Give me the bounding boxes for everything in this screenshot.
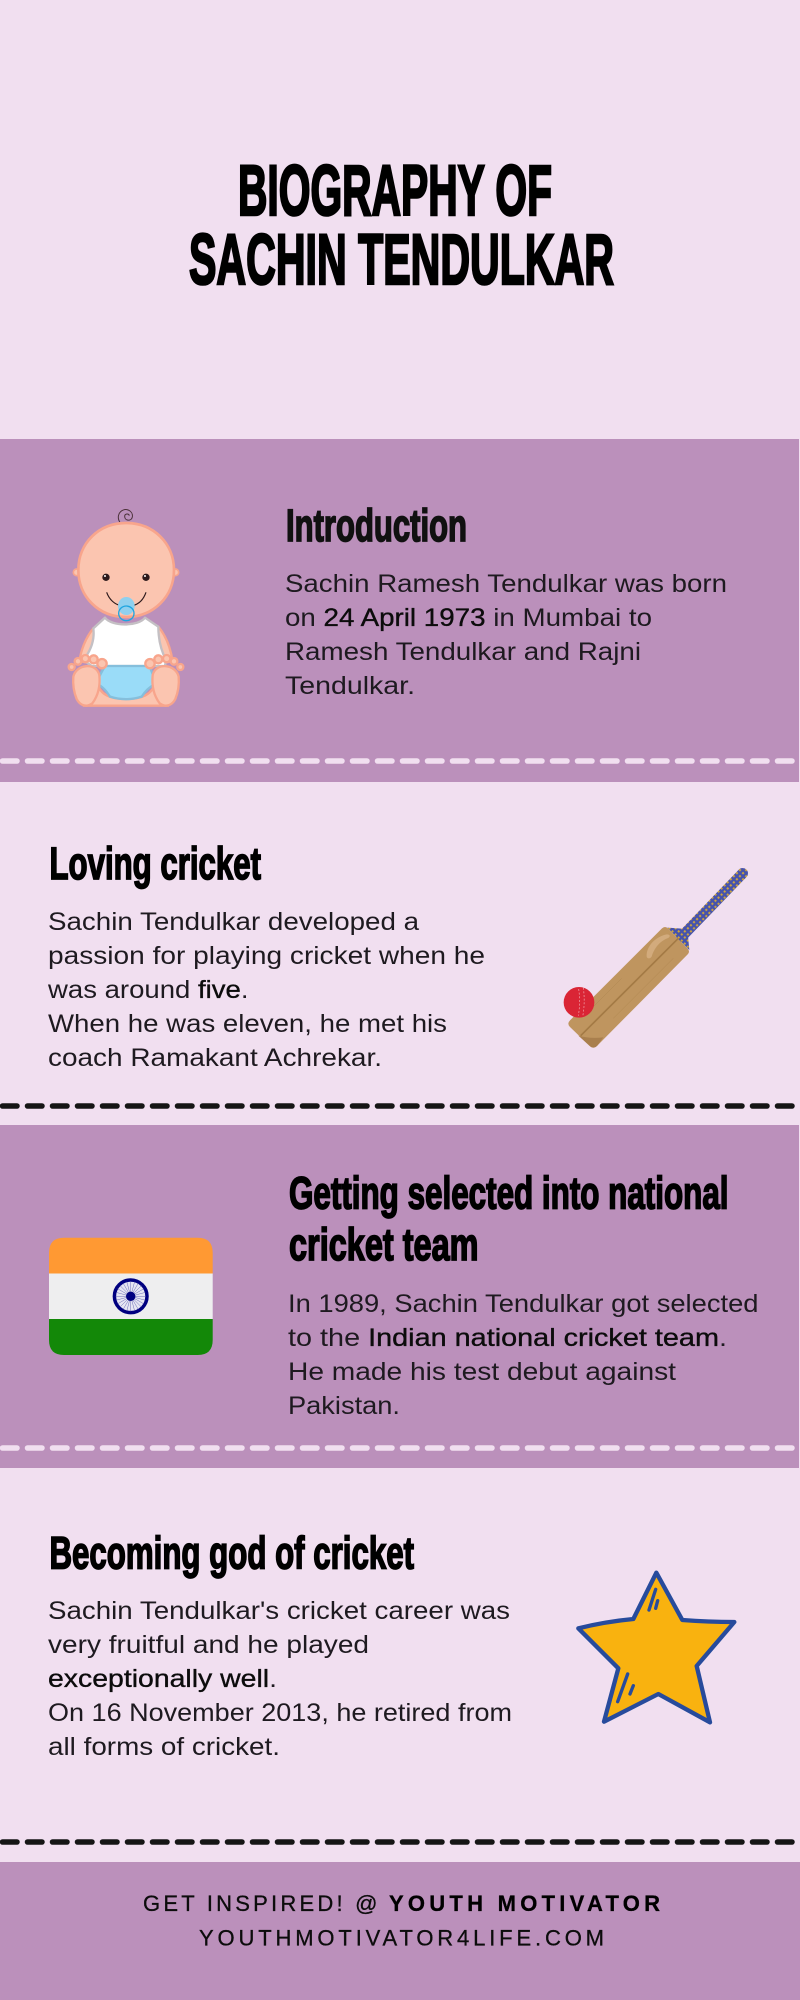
text block: introduction: on 24 April 1973 in Mumbai to — [285, 604, 652, 632]
icon: cricket bat and ball — [564, 873, 743, 1048]
text block: introduction: Tendulkar. — [285, 672, 415, 700]
text block: loving cricket: Sachin Tendulkar developed a — [48, 908, 419, 936]
text block: introduction — [285, 570, 727, 700]
footer line: get inspired: YOUTH MOTIVATOR — [389, 1891, 660, 1916]
text block: loving cricket: coach Ramakant Achrekar. — [48, 1044, 382, 1072]
panel: footer — [0, 1862, 800, 2000]
icon: baby — [69, 510, 183, 706]
icon: indian flag — [49, 1238, 213, 1355]
text block: introduction: Sachin Ramesh Tendulkar was born — [285, 570, 727, 598]
text block: national team: In 1989, Sachin Tendulkar got selected — [288, 1290, 758, 1318]
text block: becoming god of cricket: Sachin Tendulkar's cricket career was — [48, 1597, 510, 1625]
icon: star — [578, 1573, 734, 1722]
text block: national team — [288, 1290, 758, 1420]
text block: introduction: Ramesh Tendulkar and Rajni — [285, 638, 641, 666]
footer line: get inspired: GET INSPIRED! @ — [143, 1891, 378, 1916]
title: BIOGRAPHY OF — [238, 152, 552, 231]
heading: national team: cricket team — [289, 1219, 478, 1270]
footer line: get inspired — [143, 1891, 660, 1916]
panel: loving cricket — [2, 838, 795, 1106]
panel: national team — [0, 1125, 799, 1468]
heading: loving cricket: Loving cricket — [50, 838, 261, 889]
text block: national team: to the Indian national cricket team . — [288, 1324, 727, 1352]
text block: loving cricket: was around five. — [47, 976, 249, 1004]
panel: becoming god of cricket — [2, 1528, 795, 1842]
text block: loving cricket: When he was eleven, he met his — [48, 1010, 447, 1038]
text block: national team: He made his test debut against — [288, 1358, 676, 1386]
title — [189, 152, 614, 300]
panel: introduction — [0, 439, 799, 782]
text block: becoming god of cricket: all forms of cricket. — [48, 1733, 280, 1761]
text block: loving cricket — [47, 908, 485, 1072]
text block: becoming god of cricket: On 16 November 2013, he retired from — [48, 1699, 512, 1727]
footer line: website: YOUTHMOTIVATOR4LIFE.COM — [199, 1926, 604, 1950]
text block: national team: Pakistan. — [288, 1392, 400, 1420]
text block: becoming god of cricket: very fruitful and he played — [48, 1631, 369, 1659]
heading: national team — [289, 1168, 728, 1270]
heading: becoming god of cricket: Becoming god of cricket — [50, 1528, 414, 1578]
text block: becoming god of cricket: exceptionally well . — [48, 1665, 277, 1693]
text block: becoming god of cricket — [48, 1597, 512, 1761]
heading: introduction: Introduction — [286, 500, 467, 551]
text block: loving cricket: passion for playing cricket when he — [48, 942, 485, 970]
